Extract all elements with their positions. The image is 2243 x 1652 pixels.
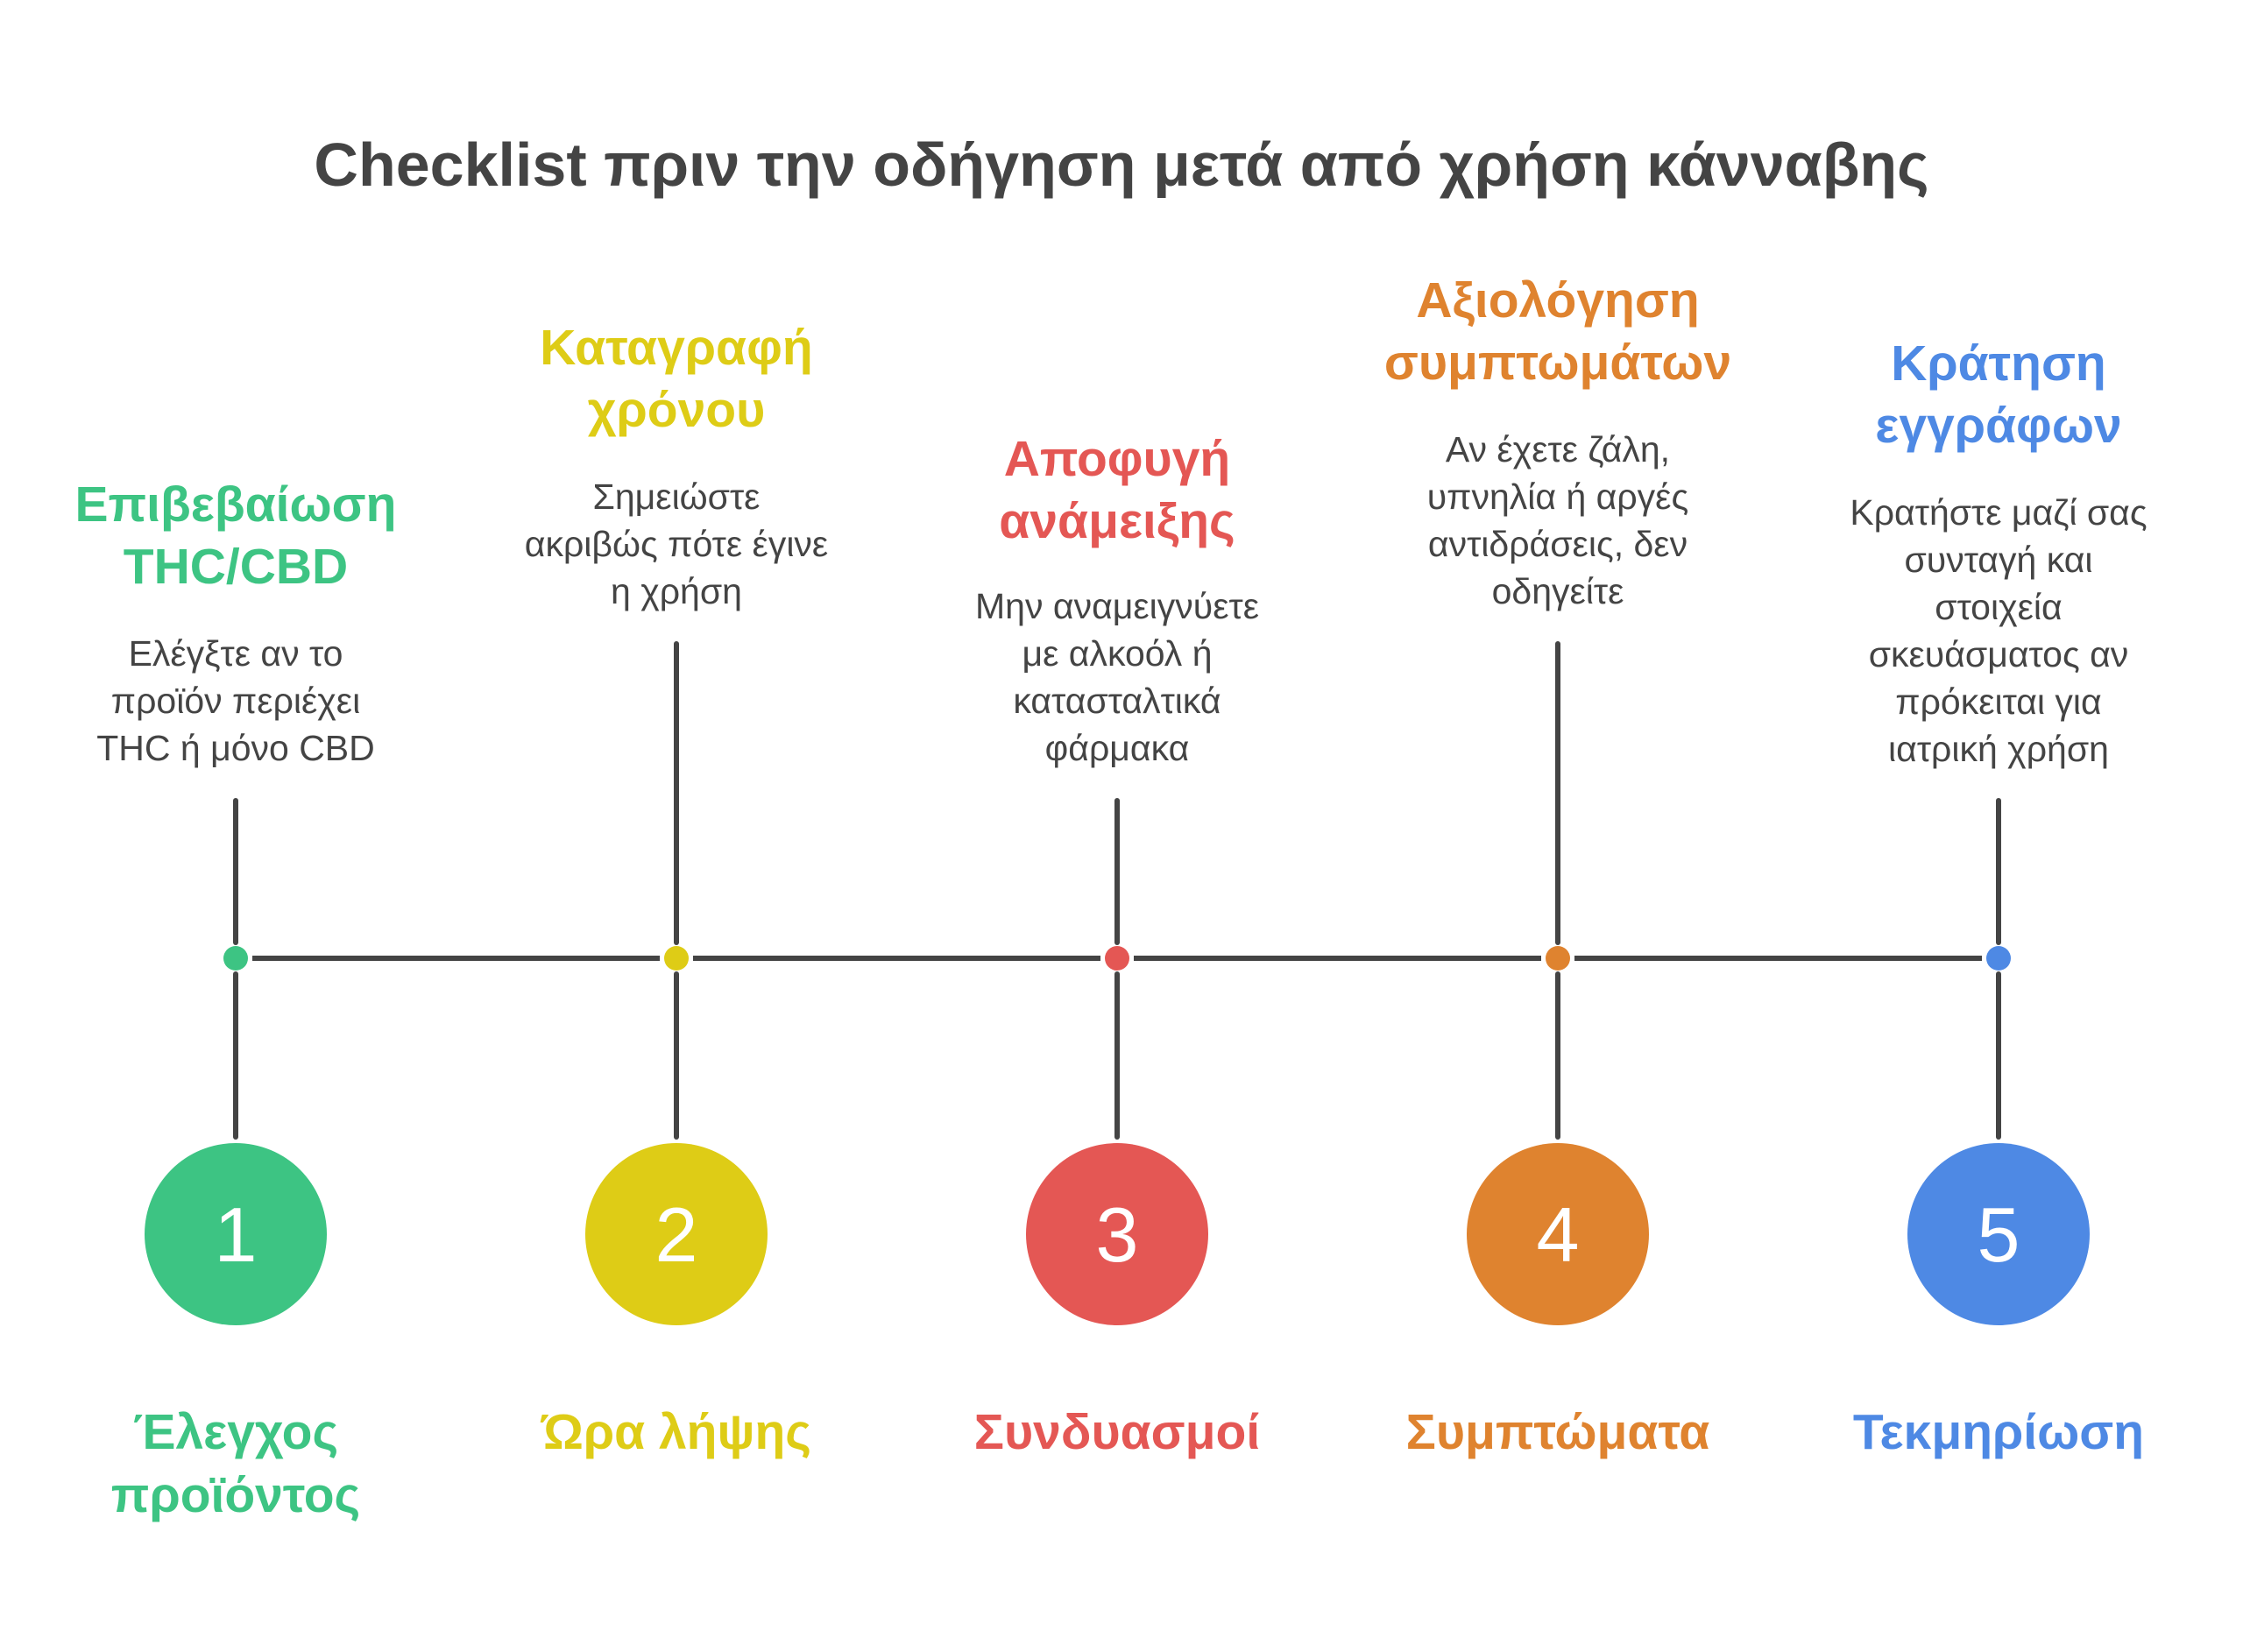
step 4 text: οδηγείτε [1492,571,1624,611]
step 1 text: Ελέγξτε αν το [129,633,343,674]
step 4 text: υπνηλία ή αργές [1427,477,1688,517]
step 3 heading: Αποφυγή [1004,431,1230,487]
step 3 text: Μην αναμειγνύετε [975,586,1259,626]
step 4 text: Αν έχετε ζάλη, [1446,429,1670,469]
title: Checklist πριν την οδήγηση μετά από χρήση κάνναβης [314,131,1929,199]
step 1 text [96,633,375,768]
step 4 heading: Αξιολόγηση [1416,272,1700,328]
step 2 text: ακριβώς πότε έγινε [525,524,828,564]
step 2 text [525,477,828,611]
label 5: Τεκμηρίωση [1853,1404,2144,1460]
step 5 text: σκευάσματος αν [1869,634,2128,674]
step 4 text [1427,429,1688,611]
step 3 text: κατασταλτικά [1013,681,1221,721]
step 5 heading [1875,335,2122,454]
label 2: Ώρα λήψης [541,1404,811,1460]
step 5 text: Κρατήστε μαζί σας [1850,492,2147,533]
label 3: Συνδυασμοί [974,1404,1260,1460]
step 5 text [1850,492,2147,769]
numbered circles: 3 [1096,1191,1138,1278]
step 1 text: προϊόν περιέχει [111,681,360,721]
step 1 text: THC ή μόνο CBD [96,728,375,768]
connector lines [236,644,1999,1137]
numbered circles [145,1143,2090,1325]
timeline dots [223,946,2011,971]
numbered circles: 5 [1978,1191,2020,1278]
step 1 heading [75,477,396,595]
step 4 heading: συμπτωμάτων [1384,335,1731,391]
numbered circles: 1 [215,1191,257,1278]
step 5 heading: Κράτηση [1891,335,2106,392]
step 2 heading: χρόνου [588,382,765,438]
step 4 heading [1384,272,1731,391]
step 4 text: αντιδράσεις, δεν [1428,524,1688,564]
step 5 text: ιατρική χρήση [1888,729,2109,769]
step 3 text [975,586,1259,768]
step 5 text: πρόκειται για [1895,681,2102,722]
step 2 heading: Καταγραφή [540,320,813,376]
step 3 text: φάρμακα [1045,728,1189,768]
step 5 text: στοιχεία [1935,587,2063,627]
step 3 heading: ανάμειξης [999,493,1235,549]
step 3 heading [999,431,1235,549]
step 2 text: Σημειώστε [593,477,760,517]
label 4: Συμπτώματα [1406,1404,1709,1460]
step 5 text: συνταγή και [1904,540,2093,580]
label 1 [111,1404,360,1523]
step 2 heading [540,320,813,438]
step 2 text: η χρήση [611,571,742,611]
step 1 heading: Επιβεβαίωση [75,477,396,533]
label 1: προϊόντος [111,1467,360,1523]
step 3 text: με αλκοόλ ή [1022,633,1213,674]
numbered circles: 4 [1537,1191,1579,1278]
step 1 heading: THC/CBD [124,539,348,595]
numbered circles: 2 [655,1191,697,1278]
timeline axis [252,956,1982,961]
label 1: Έλεγχος [133,1404,338,1460]
step 5 heading: εγγράφων [1875,398,2122,454]
